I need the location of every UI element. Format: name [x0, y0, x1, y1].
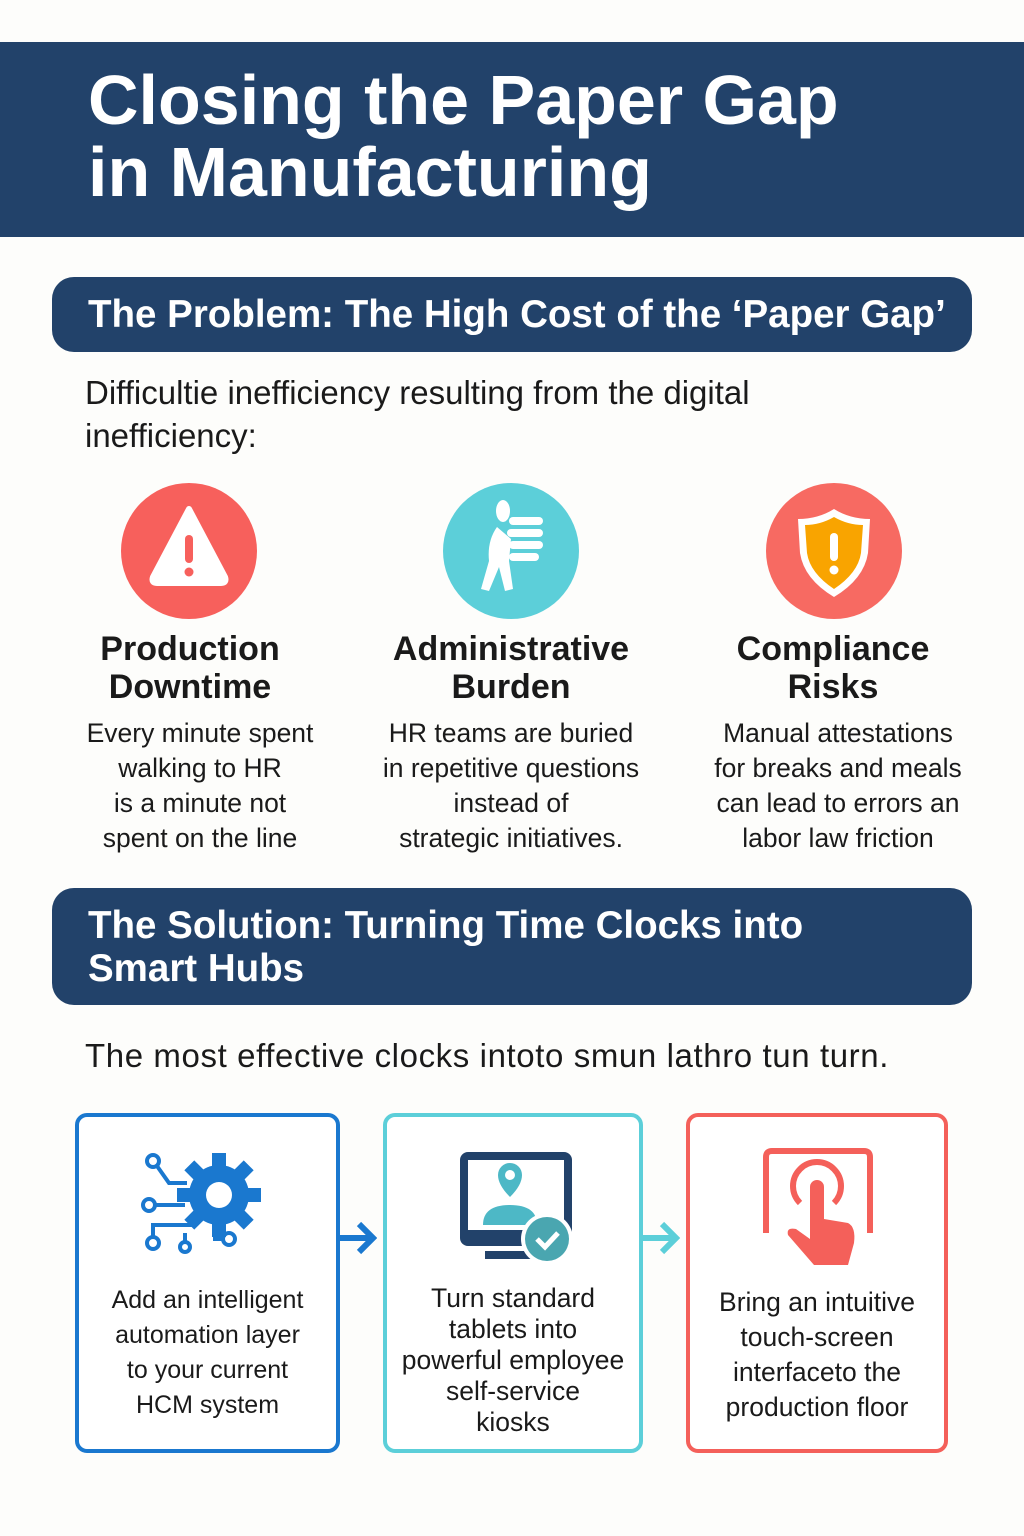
body: is a minute not	[114, 788, 286, 818]
text: tablets into	[449, 1314, 577, 1344]
body: spent on the line	[103, 823, 297, 853]
text: Add an intelligent	[112, 1286, 303, 1314]
icon: warning	[121, 483, 257, 619]
text: Bring an intuitive	[719, 1287, 915, 1317]
body: strategic initiatives.	[399, 823, 623, 853]
card 1: automation layer	[75, 1113, 340, 1453]
section header: problem	[52, 277, 972, 352]
text: to your current	[127, 1356, 288, 1384]
heading	[100, 630, 280, 706]
heading	[737, 630, 929, 706]
text: self-service	[446, 1376, 580, 1406]
icon: gear circuit	[141, 1153, 261, 1254]
column: compliance risks	[714, 630, 962, 853]
title: in Manufacturing	[88, 133, 652, 211]
text	[112, 1286, 304, 1419]
text: kiosks	[476, 1407, 550, 1437]
column: administrative burden	[383, 630, 639, 853]
body: for breaks and meals	[714, 753, 962, 783]
body	[383, 718, 639, 853]
body	[714, 718, 962, 853]
body: in repetitive questions	[383, 753, 639, 783]
heading: Downtime	[109, 668, 271, 706]
text: touch-screen	[740, 1322, 894, 1352]
text: automation layer	[115, 1321, 300, 1349]
heading: Risks	[788, 668, 878, 706]
text: production floor	[726, 1392, 908, 1422]
header banner	[0, 42, 1024, 237]
title: Closing the Paper Gap	[88, 61, 839, 139]
intro text: solution: The most effective clocks intoto smun lathro tun turn.	[85, 1037, 889, 1074]
heading: Compliance	[737, 630, 929, 668]
text: interfaceto the	[733, 1357, 901, 1387]
body: labor law friction	[742, 823, 934, 853]
section header: solution: The Solution: Turning Time Clocks into	[88, 904, 803, 947]
heading: Burden	[452, 668, 570, 706]
icon: shield	[766, 483, 902, 619]
title	[88, 61, 839, 211]
card 3: touch-screen	[686, 1113, 948, 1453]
section header: problem: The Problem: The High Cost of the ‘Paper Gap’	[88, 293, 946, 336]
text	[402, 1283, 624, 1437]
heading: Administrative	[393, 630, 629, 668]
icon: touch hand	[763, 1148, 873, 1265]
card 2: tablets kiosks	[383, 1113, 643, 1453]
text: powerful employee	[402, 1345, 624, 1375]
body: can lead to errors an	[716, 788, 960, 818]
body: walking to HR	[118, 753, 282, 783]
arrow 2	[643, 1222, 680, 1254]
section header: solution: Smart Hubs	[88, 947, 304, 990]
intro text: problem	[85, 374, 750, 454]
text	[719, 1287, 915, 1422]
body: Every minute spent	[87, 718, 313, 748]
intro text: problem: inefficiency:	[85, 417, 257, 454]
text: Turn standard	[431, 1283, 595, 1313]
icon: monitor with user and check	[460, 1152, 572, 1261]
body: HR teams are buried	[389, 718, 633, 748]
intro text: problem: Difficultie inefficiency resulting from the digital	[85, 374, 750, 411]
section header: solution	[52, 888, 972, 1005]
heading	[393, 630, 629, 706]
text: HCM system	[136, 1391, 279, 1419]
body: instead of	[454, 788, 568, 818]
icon: person carrying papers	[443, 483, 579, 619]
arrow 1	[340, 1222, 377, 1254]
body: Manual attestations	[723, 718, 953, 748]
column: production downtime	[87, 630, 314, 853]
body	[87, 718, 314, 853]
heading: Production	[100, 630, 280, 668]
